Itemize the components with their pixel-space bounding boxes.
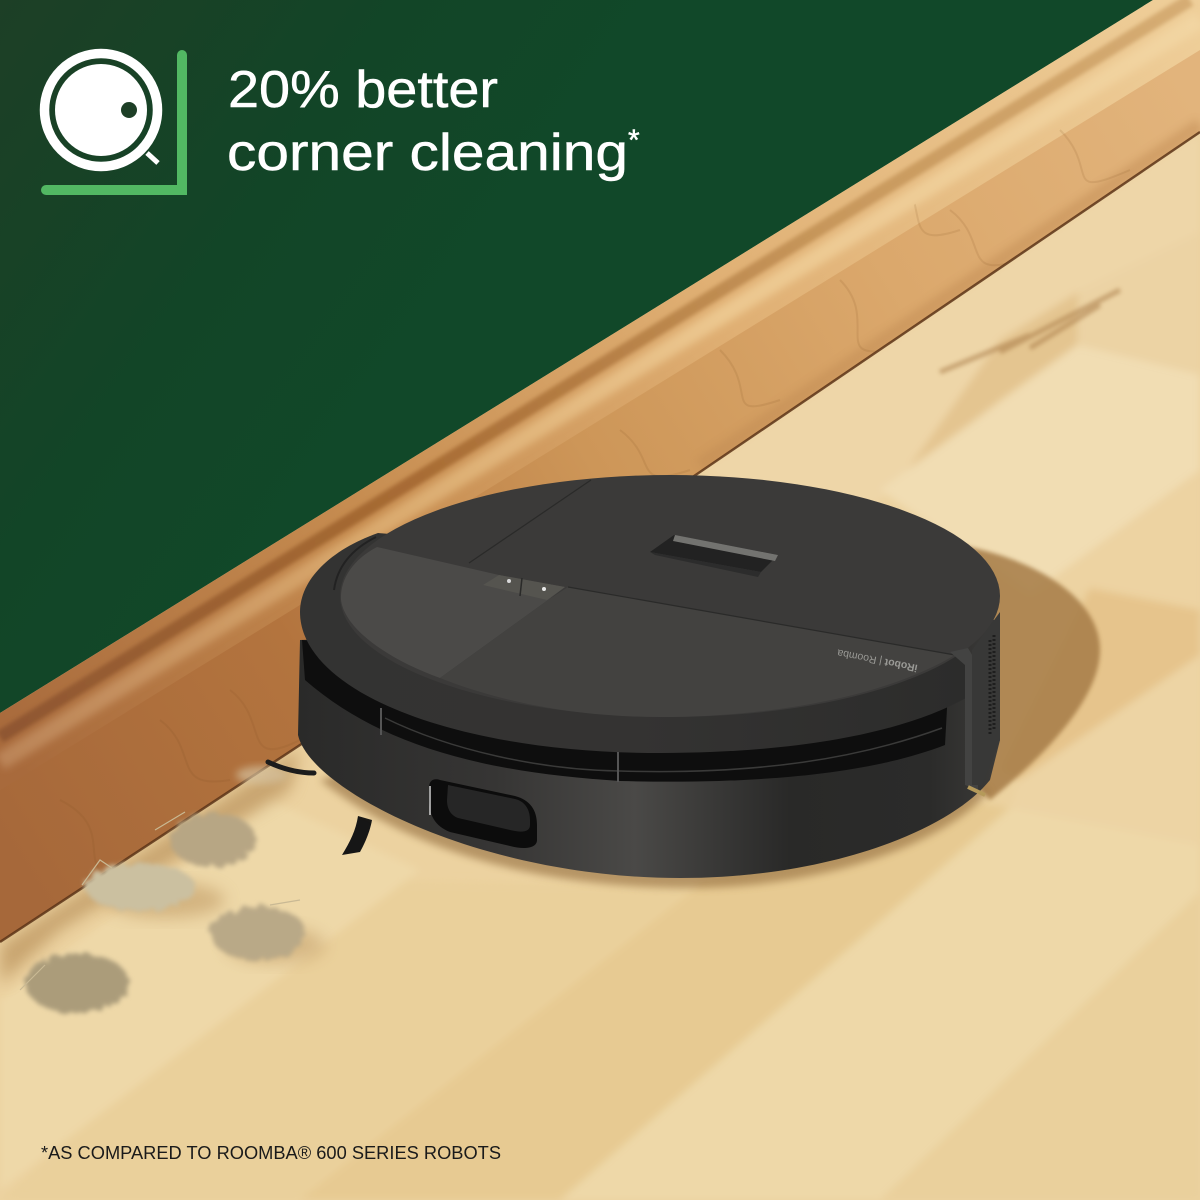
title: 20% better <box>228 61 498 119</box>
plate groove on left <box>334 537 376 590</box>
top handle slot <box>650 535 778 577</box>
robot <box>298 475 1000 888</box>
top plate <box>340 475 1000 717</box>
top plate panels <box>341 480 955 717</box>
baseboard <box>0 0 1200 942</box>
gap inner rim <box>385 718 942 772</box>
footnote: *AS COMPARED TO ROOMBA® 600 SERIES ROBOTS <box>41 1143 501 1163</box>
brand text: iRobot | Roomba <box>836 646 919 674</box>
robot body <box>298 620 1000 878</box>
control buttons <box>483 575 565 600</box>
right tower <box>950 612 1000 795</box>
icon: robot in corner <box>44 54 182 190</box>
green wall <box>0 0 1153 713</box>
contact shadow <box>320 770 990 888</box>
title: corner cleaning <box>227 124 628 182</box>
title: * <box>628 124 640 157</box>
side brush <box>268 762 372 855</box>
front sensor window <box>429 779 537 848</box>
bumper ring <box>300 533 968 753</box>
dark gap under bumper <box>302 640 948 782</box>
bumper posts <box>381 708 618 782</box>
robot shadow <box>900 545 1100 800</box>
dust bunnies <box>20 766 325 1013</box>
